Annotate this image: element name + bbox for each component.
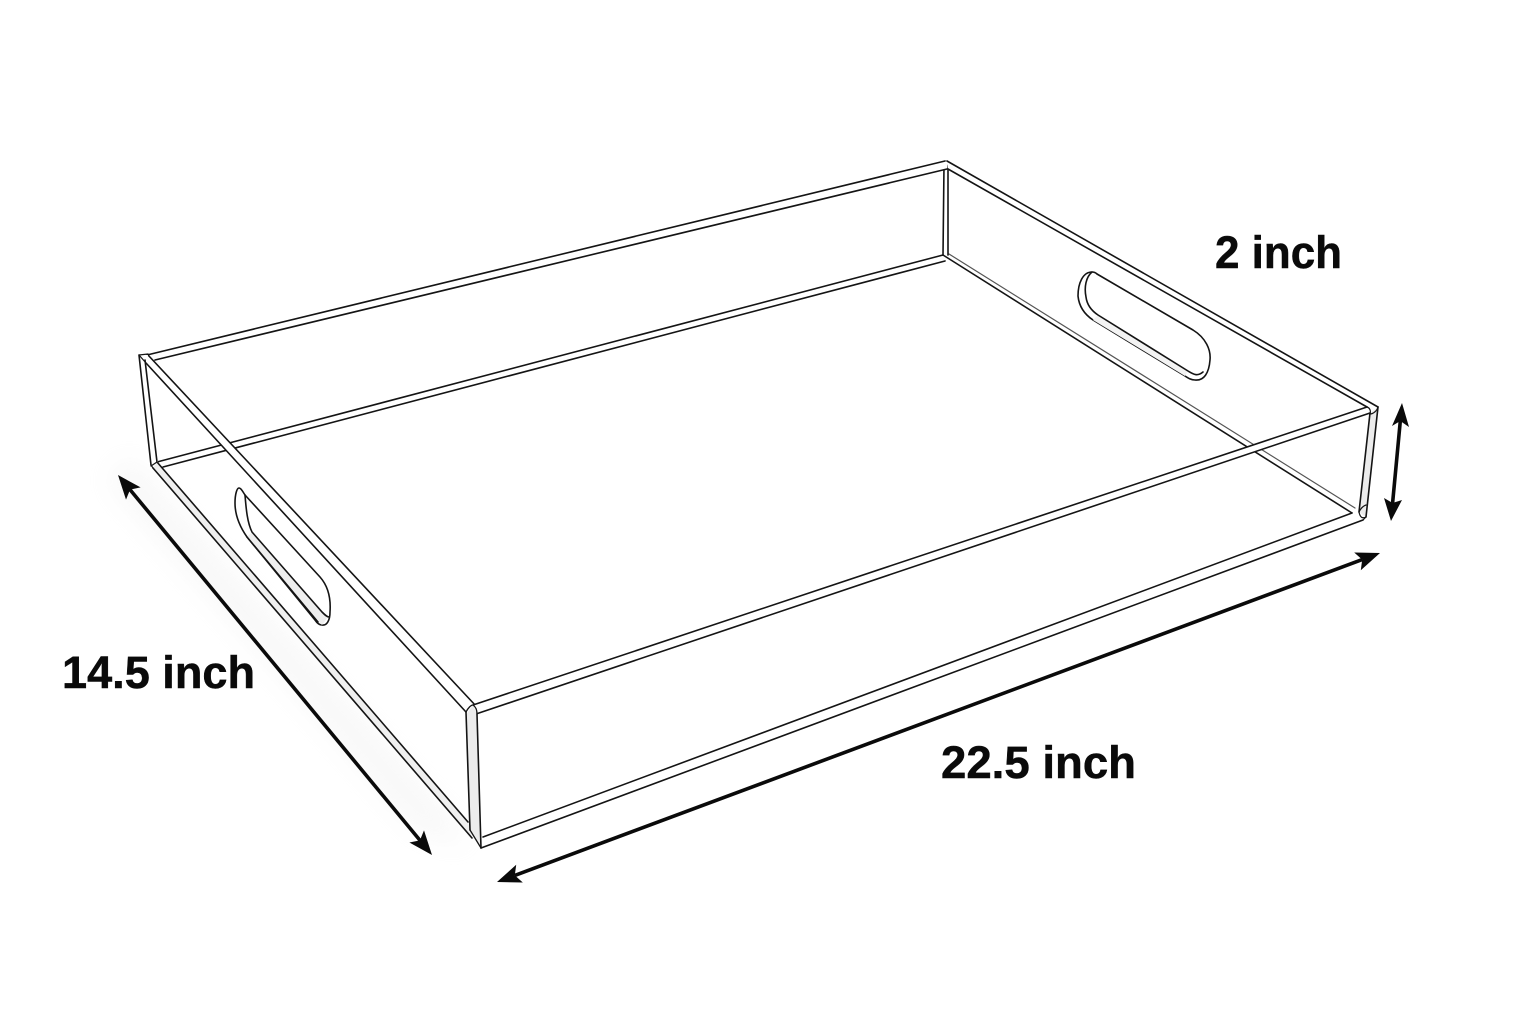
right rim (947, 161, 1378, 407)
label: 22.5 inch: 22.5 inch (941, 737, 1136, 788)
right floor rail (943, 254, 1355, 513)
label: 2 inch: 2 inch (1215, 227, 1342, 278)
arrow: 2 inch height (1384, 403, 1409, 521)
back rim (147, 161, 947, 360)
arrow: 22.5 inch length (497, 552, 1380, 882)
back floor rail (157, 255, 947, 467)
front rim (473, 407, 1370, 714)
front corner post (466, 705, 481, 848)
label: 14.5 inch: 14.5 inch (62, 647, 255, 698)
left corner post (139, 354, 158, 468)
arrow: 14.5 inch width (118, 475, 432, 855)
left floor rail (153, 462, 472, 838)
back inner corner post (943, 165, 948, 255)
left handle cutout (235, 488, 330, 625)
front bottom rail (481, 513, 1363, 848)
left rim (146, 355, 476, 712)
soft ground shadow (110, 460, 470, 845)
acrylic tray (139, 161, 1378, 848)
right corner post (1359, 407, 1378, 520)
right handle cutout (1078, 272, 1210, 380)
